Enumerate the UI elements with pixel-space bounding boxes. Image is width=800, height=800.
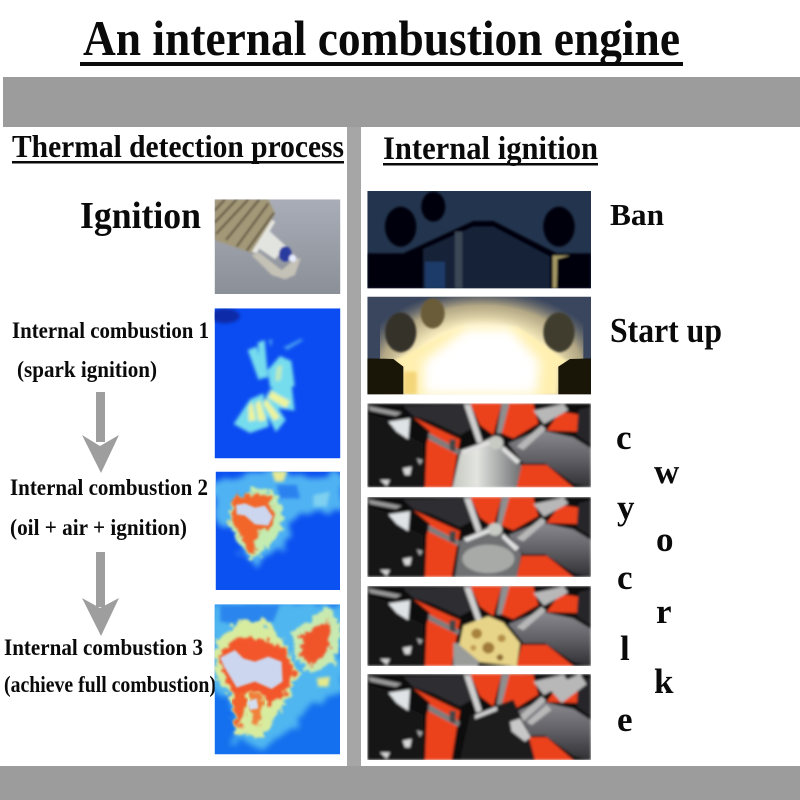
label: cycle (616, 418, 635, 739)
label: internal combustion 3: (achieve full combustion) (4, 672, 216, 697)
photo: engine cycle, compression (367, 497, 591, 577)
thermal image 3 (210, 602, 343, 754)
photo: spark plug (215, 199, 340, 294)
thermal image 2 (213, 468, 343, 590)
label: work: o (656, 520, 674, 559)
label: cycle: c (617, 558, 633, 597)
thermal image 1 (210, 308, 340, 458)
label: work: k (654, 662, 674, 701)
arrow: combustion 1 to 2 (82, 392, 119, 473)
label: work: w (654, 452, 680, 491)
title: An internal combustion engine (83, 10, 680, 66)
photo: start up, ignition flash (367, 296, 591, 394)
label: cycle: e (617, 700, 633, 739)
label: cycle: l (620, 629, 630, 668)
photo: engine cycle, exhaust (367, 674, 591, 760)
heading: internal ignition: Internal ignition (383, 131, 598, 167)
label: cycle: c (616, 418, 632, 457)
label: ignition: Ignition (80, 195, 201, 237)
label: internal combustion 3 (4, 635, 216, 697)
photo: ban, engine chamber dark (367, 191, 591, 288)
label: work: r (656, 592, 672, 631)
label: start up: Start up (610, 311, 722, 350)
heading: thermal detection process: Thermal detection process (12, 128, 344, 164)
label: work (654, 452, 680, 701)
label: ban: Ban (610, 197, 664, 232)
label: internal combustion 3: Internal combustion 3 (4, 635, 203, 660)
photo: engine cycle, intake (367, 403, 591, 487)
label: internal combustion 1: Internal combustion 1 (12, 318, 209, 343)
label: internal combustion 1 (12, 318, 209, 382)
label: internal combustion 2 (10, 475, 208, 540)
photo: engine cycle, combustion (367, 586, 591, 666)
label: internal combustion 2: (oil + air + ignition) (10, 515, 187, 540)
label: internal combustion 2: Internal combustion 2 (10, 475, 208, 500)
label: cycle: y (617, 488, 635, 527)
label: internal combustion 1: (spark ignition) (17, 357, 157, 382)
arrow: combustion 2 to 3 (82, 552, 119, 636)
